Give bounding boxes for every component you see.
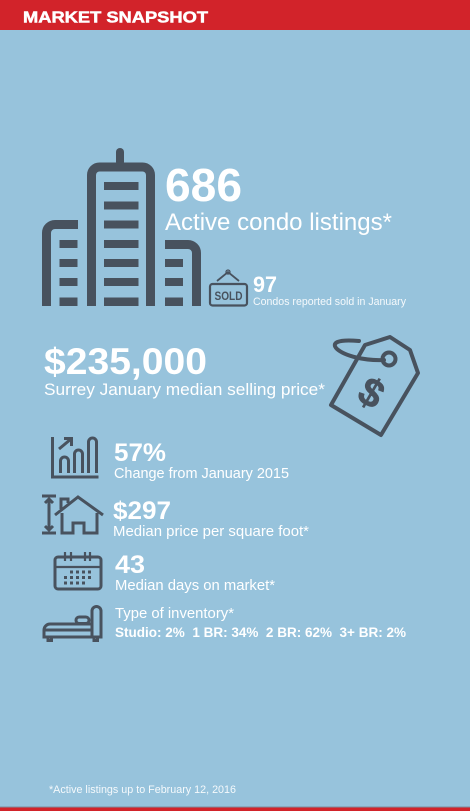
- icon: price tag: $: [350, 369, 392, 418]
- stat: condos sold: Condos reported sold in January: [253, 296, 406, 308]
- stat: days on market: Median days on market*: [115, 577, 275, 594]
- stat: median selling price: $235,000: [44, 341, 207, 382]
- stat: active condo listings: [165, 159, 392, 236]
- icon: sold sign: [210, 270, 247, 306]
- icon: bed: [44, 607, 101, 640]
- heading: MARKET SNAPSHOT: [23, 10, 208, 26]
- stat: days on market: [115, 551, 275, 594]
- stat: price per square foot: [113, 497, 309, 540]
- stat: median selling price: [44, 341, 325, 399]
- icon: house with height arrow: [42, 496, 103, 533]
- icon: condo buildings: [46, 148, 196, 306]
- icon: price tag: [331, 337, 418, 435]
- stat: price per square foot: $297: [113, 497, 171, 525]
- icon: calendar: [55, 552, 101, 589]
- icon: rising bar chart: [52, 437, 98, 477]
- stat: type of inventory: Type of inventory*: [115, 606, 234, 622]
- stat: days on market: 43: [115, 551, 145, 579]
- stat: condos sold: 97: [253, 272, 277, 297]
- stat: condos sold: [253, 272, 406, 308]
- stat: change from January 2015: Change from January 2015: [114, 465, 289, 482]
- stat: active condo listings: Active condo listings*: [165, 209, 392, 236]
- stat: price per square foot: Median price per square foot*: [113, 523, 309, 540]
- footer band: [0, 806, 470, 811]
- stat: change from January 2015: 57%: [114, 439, 166, 467]
- stat: change from January 2015: [114, 439, 289, 482]
- stat: type of inventory: Studio: 2% 1 BR: 34% 2 BR: 62% 3+ BR: 2%: [115, 625, 406, 640]
- header band: [0, 0, 470, 30]
- stat: type of inventory: [115, 606, 406, 640]
- icon: sold sign: SOLD: [214, 289, 243, 303]
- stat: median selling price: Surrey January median selling price*: [44, 380, 325, 399]
- footnote: *Active listings up to February 12, 2016: [49, 784, 236, 796]
- stat: active condo listings: 686: [165, 159, 242, 211]
